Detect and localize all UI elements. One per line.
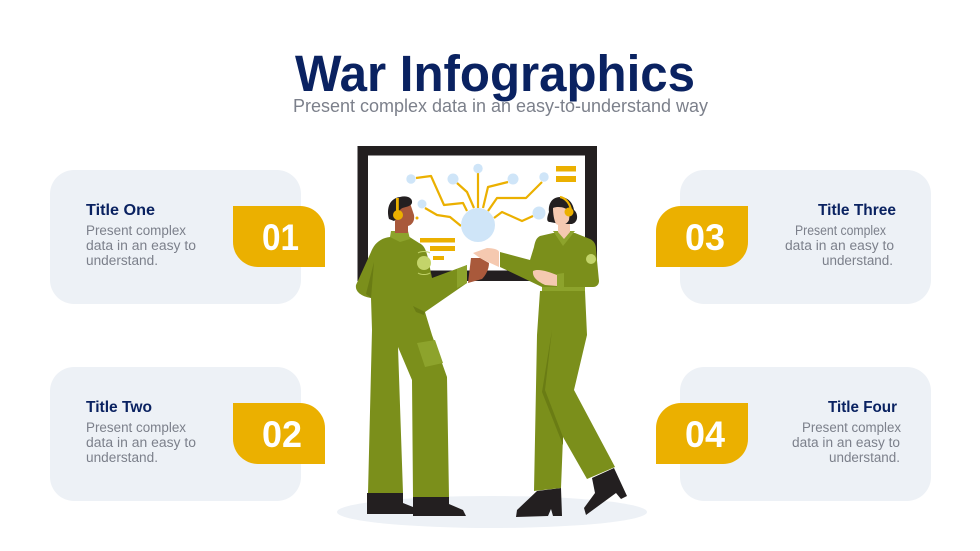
title: War Infographics bbox=[295, 45, 695, 102]
panel: title two: understand. bbox=[86, 450, 158, 465]
panel: title one: Title One bbox=[86, 202, 155, 219]
panel: title three: Present complex bbox=[795, 223, 886, 238]
panel: title four: understand. bbox=[829, 450, 900, 465]
panel: title four bbox=[656, 367, 931, 501]
panel: title two: 02 bbox=[262, 414, 302, 455]
panel: title one: understand. bbox=[86, 253, 158, 268]
panel: title two: Present complex bbox=[86, 420, 186, 435]
panel: title two: data in an easy to bbox=[86, 435, 196, 450]
panel: title three: understand. bbox=[822, 253, 893, 268]
panel: title two bbox=[50, 367, 325, 501]
panel: title three: data in an easy to bbox=[785, 238, 894, 253]
display board bbox=[358, 146, 597, 281]
panel: title four: data in an easy to bbox=[792, 435, 900, 450]
floor shadow bbox=[337, 496, 647, 528]
panel: title four: Title Four bbox=[828, 399, 897, 416]
figure: woman bbox=[473, 197, 627, 517]
panel: title three: 03 bbox=[685, 217, 725, 258]
panel: title one bbox=[50, 170, 325, 304]
figure: man bbox=[356, 196, 489, 516]
panel: title four: Present complex bbox=[802, 420, 901, 435]
panel: title three bbox=[656, 170, 931, 304]
panel: title four: 04 bbox=[685, 414, 725, 455]
panel: title three: Title Three bbox=[818, 202, 896, 219]
panel: title one: Present complex bbox=[86, 223, 186, 238]
panel: title two: Title Two bbox=[86, 399, 152, 416]
subtitle: Present complex data in an easy-to-understand way bbox=[293, 96, 708, 116]
panel: title one: data in an easy to bbox=[86, 238, 196, 253]
panel: title one: 01 bbox=[262, 217, 299, 258]
